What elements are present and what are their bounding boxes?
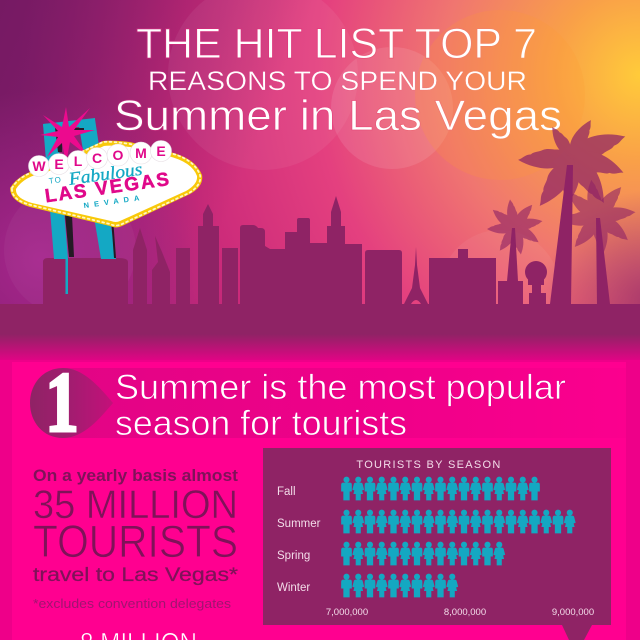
sign wording: Fabulous <box>66 159 143 189</box>
sign body <box>10 141 202 228</box>
pictogram row: fall <box>342 477 540 500</box>
chart title: TOURISTS BY SEASON <box>356 459 502 471</box>
welcome letters: E <box>156 143 166 159</box>
welcome letters: L <box>74 153 83 169</box>
heading band <box>63 368 626 438</box>
title: Summer in Las Vegas <box>114 92 562 140</box>
season labels: Winter <box>277 582 310 594</box>
marquee bulbs <box>12 142 200 226</box>
tourist statistic text <box>33 466 238 611</box>
sign wording: LAS VEGAS <box>44 169 170 207</box>
pictogram row: winter <box>342 574 458 597</box>
number badge: 1 <box>45 354 79 450</box>
tourist statistic text: *excludes convention delegates <box>33 597 231 611</box>
season labels: Fall <box>277 486 296 498</box>
welcome to Las Vegas sign <box>10 107 202 294</box>
city skyline silhouette <box>43 196 547 304</box>
ground band fading into pink <box>0 304 640 364</box>
season labels <box>277 486 321 594</box>
small palm <box>487 199 543 281</box>
pictogram row: summer <box>342 510 575 533</box>
sign wording <box>42 155 171 215</box>
welcome letters <box>28 140 172 176</box>
title <box>114 20 562 140</box>
axis labels: 9,000,000 <box>552 607 594 618</box>
welcome letters: O <box>113 147 124 163</box>
pictogram row: spring <box>342 542 505 565</box>
welcome letters: E <box>54 156 64 172</box>
welcome letters: M <box>135 145 147 161</box>
section heading: season for tourists <box>115 404 407 443</box>
panel: reason 1 <box>0 354 640 640</box>
welcome letters: C <box>92 150 102 166</box>
welcome letters: W <box>32 158 46 174</box>
back palm <box>560 179 636 304</box>
sign wording: TO <box>48 175 62 186</box>
sign posts <box>43 118 116 294</box>
tourist statistic text: TOURISTS <box>33 516 238 567</box>
tourist statistic text: travel to Las Vegas* <box>33 564 238 586</box>
axis labels: 7,000,000 <box>326 607 368 618</box>
title: REASONS TO SPEND YOUR <box>148 66 527 96</box>
tourist statistic text: On a yearly basis almost <box>33 466 238 485</box>
sign wording: NEVADA <box>83 193 145 210</box>
axis labels: 8,000,000 <box>444 607 486 618</box>
chart: tourists by season <box>263 448 611 640</box>
title: THE HIT LIST TOP 7 <box>136 20 537 68</box>
season labels: Spring <box>277 550 310 562</box>
axis labels <box>326 607 594 618</box>
section heading: Summer is the most popular <box>115 368 566 407</box>
season labels: Summer <box>277 518 321 530</box>
starburst <box>40 107 95 163</box>
number badge <box>30 354 113 450</box>
tall palm <box>518 117 628 304</box>
section heading <box>115 368 566 443</box>
tourist statistic text: 35 MILLION <box>33 483 238 527</box>
palm trees <box>487 117 636 304</box>
header background with sunset gradient and bokeh <box>0 0 640 350</box>
